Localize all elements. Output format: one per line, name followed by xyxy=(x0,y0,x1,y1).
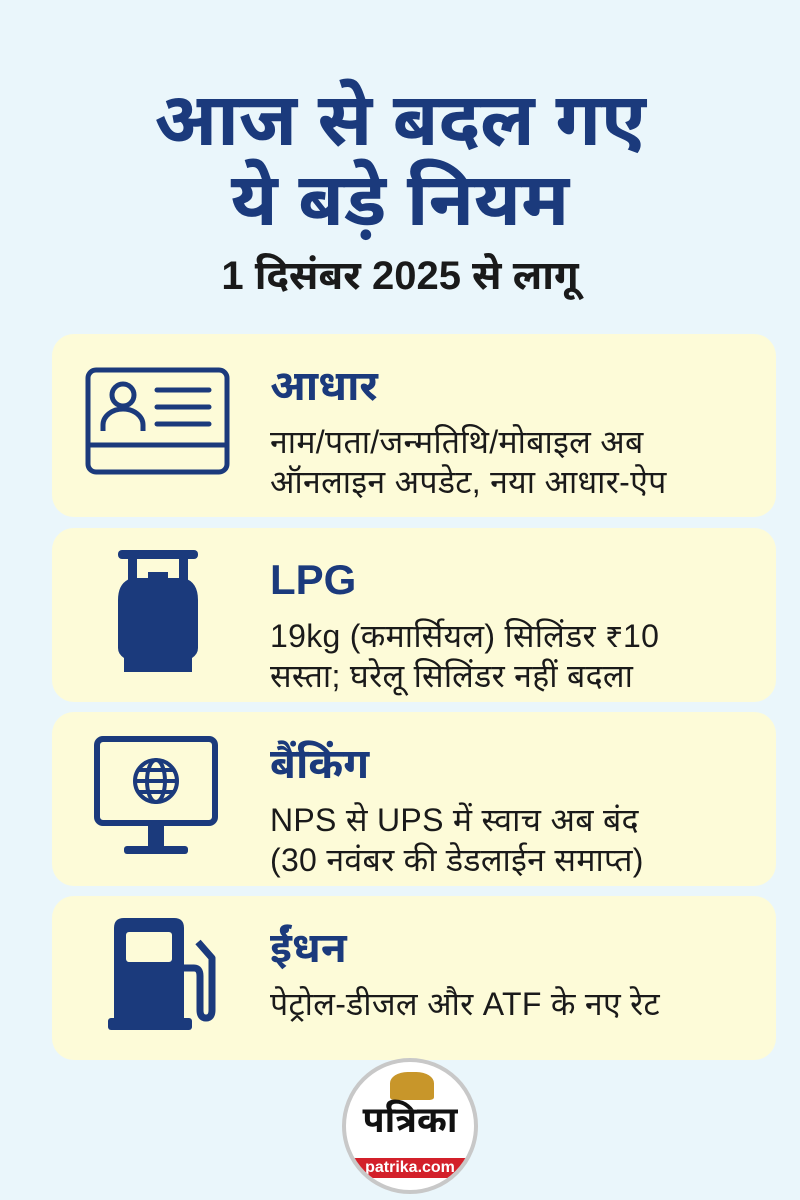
title: ये बड़े नियम xyxy=(231,158,569,241)
text: (30 नवंबर की डेडलाईन समाप्त) xyxy=(270,842,644,878)
icon: lion xyxy=(390,1072,434,1100)
text: ऑनलाइन अपडेट, नया आधार-ऐप xyxy=(270,464,667,500)
title: आज से बदल गए xyxy=(154,78,646,161)
title xyxy=(154,78,648,241)
panel: lpg xyxy=(52,528,776,702)
logo: patrika xyxy=(342,1058,478,1194)
text: NPS से UPS में स्वाच अब बंद xyxy=(270,802,639,838)
text xyxy=(270,618,659,696)
text xyxy=(270,424,667,500)
text: पेट्रोल-डीजल और ATF के नए रेट xyxy=(270,986,660,1022)
panel: fuel xyxy=(52,896,776,1060)
panel: aadhaar xyxy=(52,334,776,517)
heading: बैंकिंग xyxy=(270,740,369,787)
icon: fuel pump xyxy=(108,918,216,1030)
subtitle: 1 दिसंबर 2025 से लागू xyxy=(221,254,579,298)
text: सस्ता; घरेलू सिलिंडर नहीं बदला xyxy=(270,658,633,694)
heading: LPG xyxy=(270,556,356,603)
icon: cylinder xyxy=(118,550,198,672)
icon: id card xyxy=(86,368,230,474)
heading: आधार xyxy=(270,362,378,409)
panel: banking xyxy=(52,712,776,886)
text: नाम/पता/जन्मतिथि/मोबाइल अब xyxy=(270,424,644,460)
text xyxy=(270,802,644,878)
logo text: पत्रिका xyxy=(363,1099,457,1140)
logo url xyxy=(354,1158,466,1178)
icon: monitor xyxy=(94,736,218,854)
logo url: patrika.com xyxy=(365,1159,455,1176)
text: 19kg (कमार्सियल) सिलिंडर ₹10 xyxy=(270,618,659,654)
heading: ईंधन xyxy=(270,924,347,971)
